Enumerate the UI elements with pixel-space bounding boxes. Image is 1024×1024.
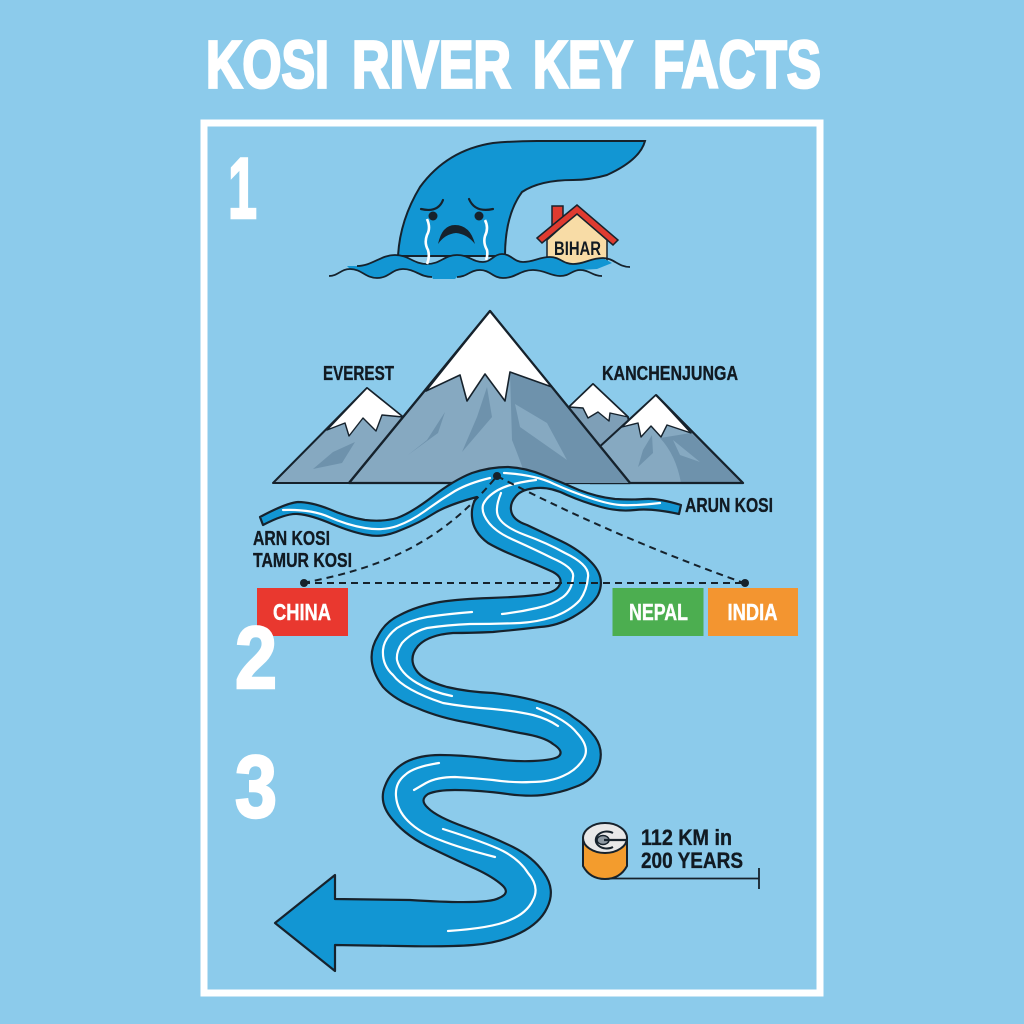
country box: India: INDIA [728,599,778,625]
country box: India [708,588,798,636]
number 2: 2 [235,608,277,707]
house [537,205,618,267]
sad face [421,199,493,264]
country box: China: CHINA [273,599,331,625]
wave lines [357,254,630,267]
icon: tree-ring cylinder with scale line [583,823,759,889]
back mountain [569,384,640,483]
right mountain [560,395,743,483]
text: 112 km in: 112 KM in [641,825,732,850]
number 3: 3 [235,737,277,836]
label: Everest: EVEREST [323,363,394,385]
title: KEY [533,28,633,102]
text: 200 years: 200 YEARS [641,848,743,873]
left mountain [273,388,420,483]
icon: crying flood wave over Bihar house [329,141,645,279]
river body [260,467,681,971]
country box: Nepal [612,588,704,636]
flood water [347,254,612,279]
river highlights [283,473,660,931]
panel: main frame [204,123,820,993]
title: KOSI [206,28,329,102]
title: FACTS [653,28,821,102]
chart: Kosi river course with tributaries and arrow [260,467,681,971]
main mountain [349,311,630,483]
label: Kanchenjunga: KANCHENJUNGA [602,363,738,385]
country box: Nepal: NEPAL [629,599,688,625]
title: RIVER [352,28,511,102]
label: Arn Kosi: ARN KOSI [253,528,330,550]
label: Arun Kosi: ARUN KOSI [685,495,773,517]
wave body [398,141,645,256]
dashed connector lines [303,476,744,583]
junction dots [300,472,749,587]
number 1: 1 [228,141,257,237]
title [206,28,821,102]
label: Tamur Kosi: TAMUR KOSI [253,550,352,572]
house label: BIHAR [554,239,601,260]
illustration: mountains [273,311,743,483]
country box: China [257,588,348,636]
